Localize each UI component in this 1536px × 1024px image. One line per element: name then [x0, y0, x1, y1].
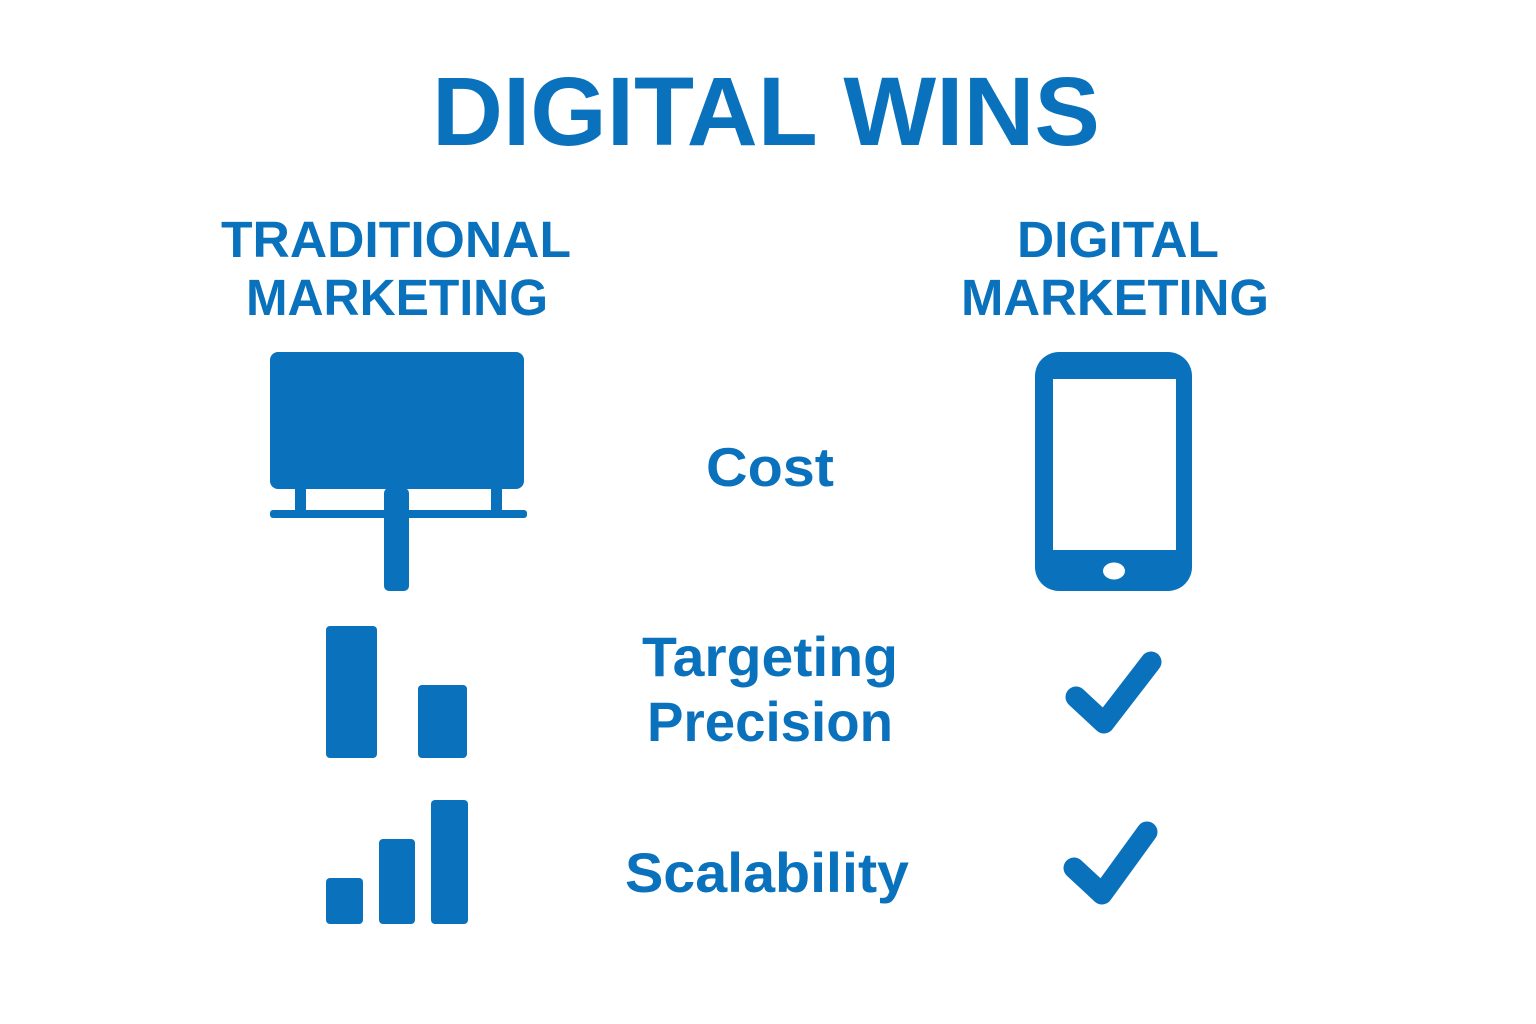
heading: digital marketing: MARKETING — [961, 269, 1269, 326]
icon: scalability bars — [326, 800, 468, 924]
icon: smartphone — [1035, 352, 1192, 591]
label: cost: Cost — [706, 436, 834, 498]
icon: check targeting — [1076, 662, 1151, 723]
heading: traditional marketing: TRADITIONAL — [221, 211, 571, 268]
label: scalability: Scalability — [625, 841, 909, 904]
label: targeting precision: Targeting — [642, 625, 898, 688]
heading: traditional marketing — [221, 211, 571, 326]
heading: traditional marketing: MARKETING — [246, 269, 548, 326]
icon: check scalability — [1074, 832, 1147, 894]
label: targeting precision: Precision — [647, 690, 893, 753]
heading: digital marketing — [961, 211, 1269, 326]
icon: billboard — [270, 352, 527, 591]
icon: targeting bars — [326, 626, 467, 758]
label: targeting precision — [642, 625, 898, 753]
heading: digital marketing: DIGITAL — [1017, 211, 1219, 268]
title: DIGITAL WINS — [432, 57, 1100, 166]
